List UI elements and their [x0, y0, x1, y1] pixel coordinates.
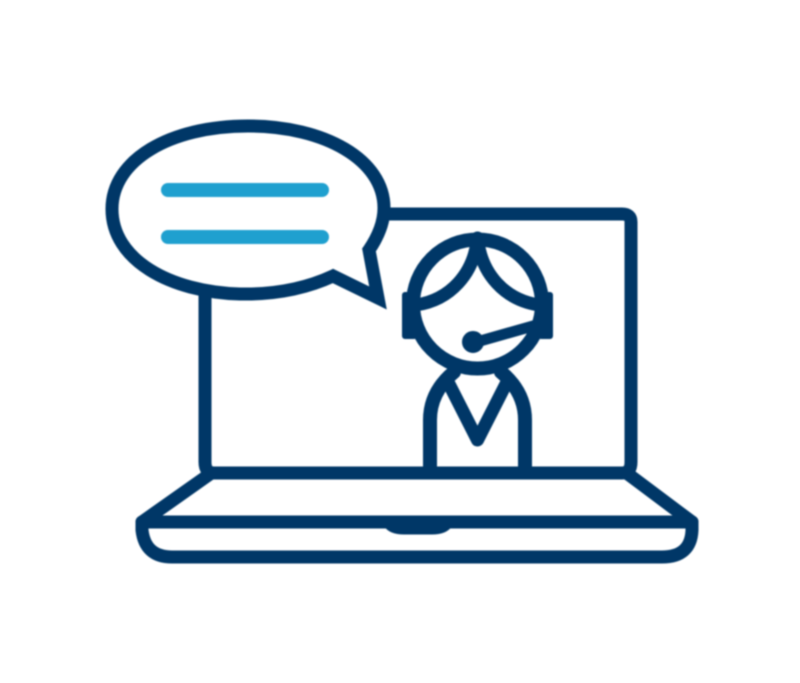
body: [430, 372, 525, 470]
speech bubble: [112, 126, 384, 298]
headset earpieces: [402, 292, 553, 339]
laptop screen: [205, 214, 631, 473]
bubble text lines: [168, 190, 322, 237]
headset microphone: [473, 324, 540, 343]
head: [413, 240, 542, 368]
laptop base: [142, 474, 692, 557]
support agent: [402, 238, 553, 470]
hair: [416, 238, 539, 305]
